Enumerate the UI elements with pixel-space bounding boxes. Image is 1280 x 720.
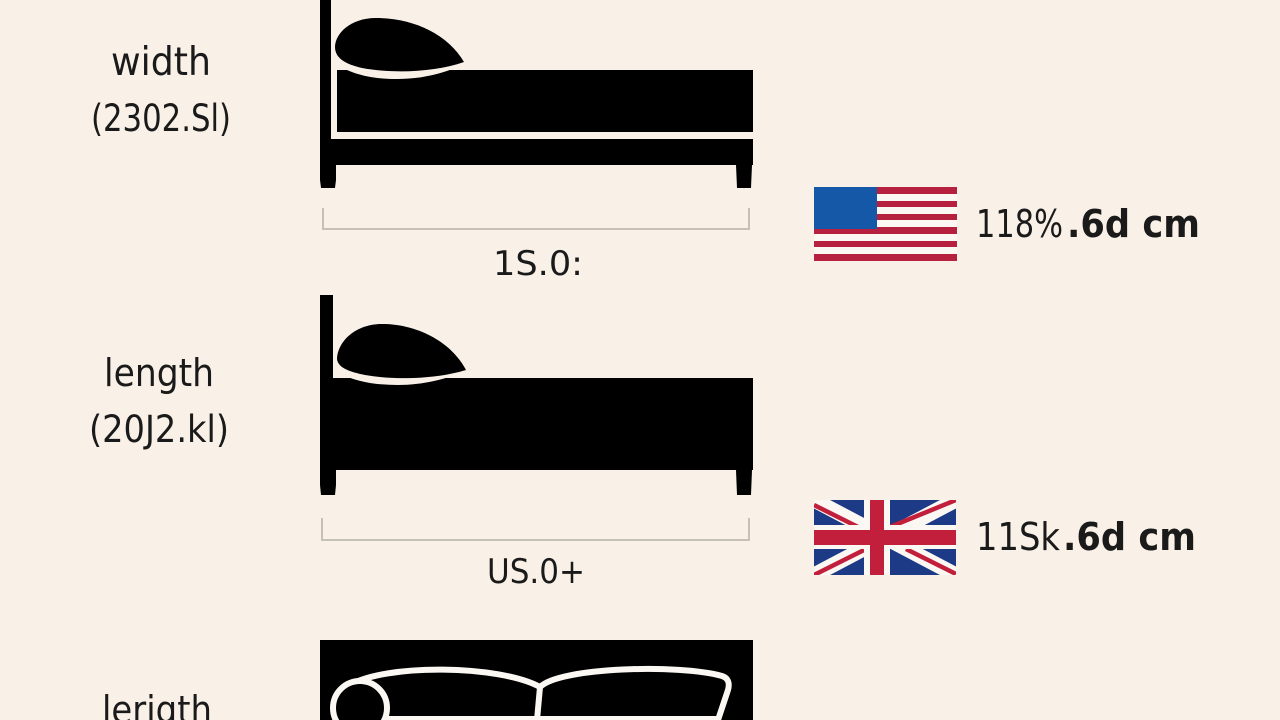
- icon: middle bed: [320, 295, 753, 495]
- value: UK: [976, 515, 1196, 559]
- label: width: [91, 40, 231, 140]
- value: US: .6d cm: [1067, 202, 1200, 246]
- caption: top bed: 1S.0:: [493, 244, 583, 284]
- value: UK: 11Sk: [976, 515, 1060, 559]
- value: US: [976, 202, 1200, 246]
- label: width: (2302.Sl): [91, 97, 231, 140]
- icon: US flag: [814, 187, 957, 261]
- bracket: top: [323, 208, 749, 229]
- label: length: length: [104, 351, 214, 395]
- icon: UK flag: [814, 500, 956, 575]
- value: UK: .6d cm: [1063, 515, 1196, 559]
- icon: bottom bed: [320, 640, 753, 720]
- label: length: [89, 351, 229, 451]
- bracket: middle: [322, 518, 749, 540]
- caption: middle bed: US.0+: [487, 552, 585, 592]
- label: length: (20J2.kl): [89, 408, 229, 451]
- label: width: width: [111, 40, 211, 85]
- icon: top bed: [320, 0, 753, 188]
- value: US: 118%: [976, 202, 1063, 246]
